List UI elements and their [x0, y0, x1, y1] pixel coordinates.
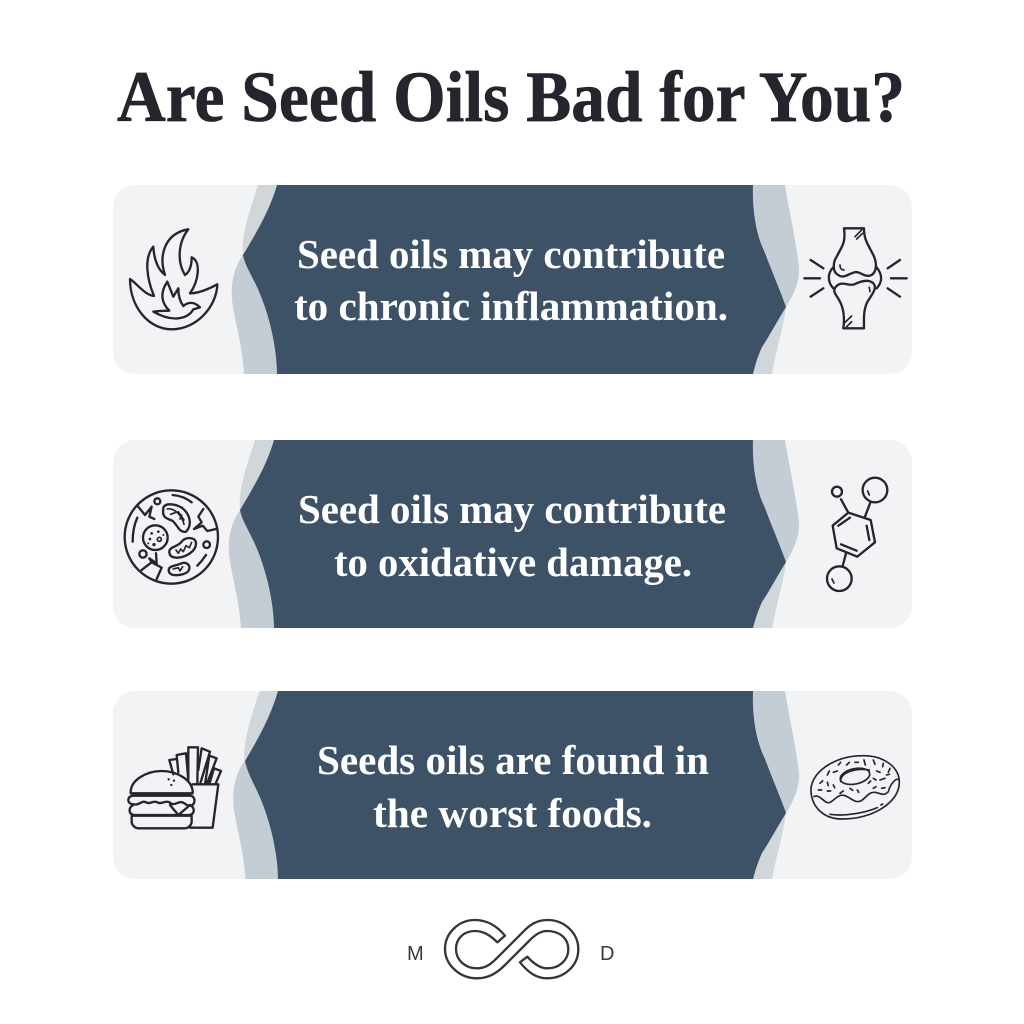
panel: oxidative damage: [113, 440, 912, 629]
icon: donut: [811, 756, 899, 819]
panel background: [113, 440, 912, 628]
icon: knee joint: [804, 228, 907, 328]
banner text: [294, 231, 728, 329]
title: Are Seed Oils Bad for You?: [117, 57, 905, 137]
navy banner: [243, 185, 786, 374]
logo infinity mark: [445, 920, 578, 978]
panel background: [113, 691, 912, 879]
navy banner: [245, 691, 786, 879]
banner text: to oxidative damage.: [334, 539, 692, 585]
banner text: Seeds oils are found in: [317, 737, 709, 783]
panel background: [113, 185, 912, 374]
banner text: Seed oils may contribute: [298, 486, 726, 532]
icon: damaged cell: [125, 490, 218, 584]
logo: [407, 920, 614, 978]
banner text: the worst foods.: [373, 790, 652, 836]
icon: flame: [130, 229, 217, 329]
banner text: to chronic inflammation.: [294, 283, 728, 329]
logo letter M: M: [407, 943, 424, 965]
panel: worst foods: [113, 691, 912, 880]
logo letter D: D: [600, 943, 614, 965]
navy banner: [240, 440, 786, 628]
icon: molecule: [827, 478, 887, 591]
banner text: [317, 737, 709, 836]
panel: chronic inflammation: [113, 185, 912, 374]
banner text: [298, 486, 726, 585]
icon: burger and fries: [128, 747, 221, 828]
banner text: Seed oils may contribute: [297, 231, 725, 277]
